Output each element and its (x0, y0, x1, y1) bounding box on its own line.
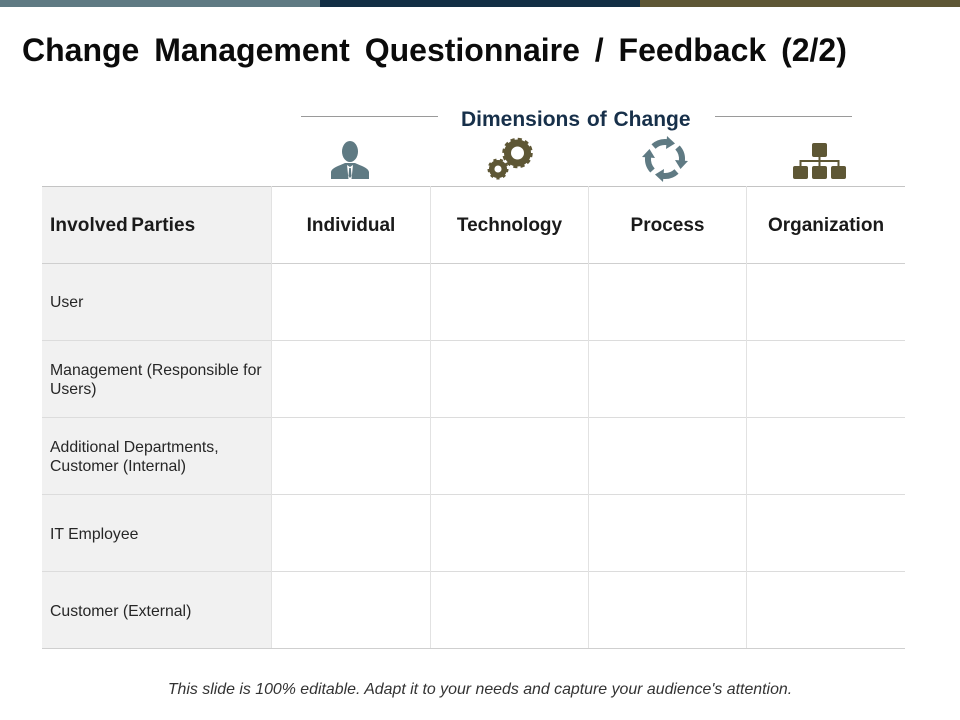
table header: individual: Individual (307, 215, 395, 236)
footer note: This slide is 100% editable. Adapt it to your needs and capture your audience's attention. (168, 681, 792, 698)
row label: management (50, 362, 262, 398)
row label: user: User (50, 294, 83, 311)
row label: additional departments (50, 439, 219, 475)
row label: additional departments: Additional Departments, (50, 439, 219, 456)
row label: IT employee: IT Employee (50, 526, 138, 543)
row label: management: Users) (50, 381, 97, 398)
top colour bar (0, 0, 960, 7)
row label: customer external: Customer (External) (50, 603, 191, 620)
heading: dimensions of change: Dimensions of Change (461, 108, 691, 131)
title: Change Management Questionnaire / Feedback (2/2) (22, 32, 847, 68)
table header: organization: Organization (768, 215, 884, 236)
icon: process cycle arrows (642, 136, 688, 182)
table header: involved parties: Involved Parties (50, 215, 195, 236)
icon: gears (488, 138, 533, 180)
row label: additional departments: Customer (Internal) (50, 458, 186, 475)
icon: person (331, 141, 369, 179)
icon: organization chart (793, 143, 846, 179)
row label: management: Management (Responsible for (50, 362, 262, 379)
table header: process: Process (631, 215, 704, 236)
table header: technology: Technology (457, 215, 562, 236)
panel: involved parties column background (42, 186, 271, 648)
